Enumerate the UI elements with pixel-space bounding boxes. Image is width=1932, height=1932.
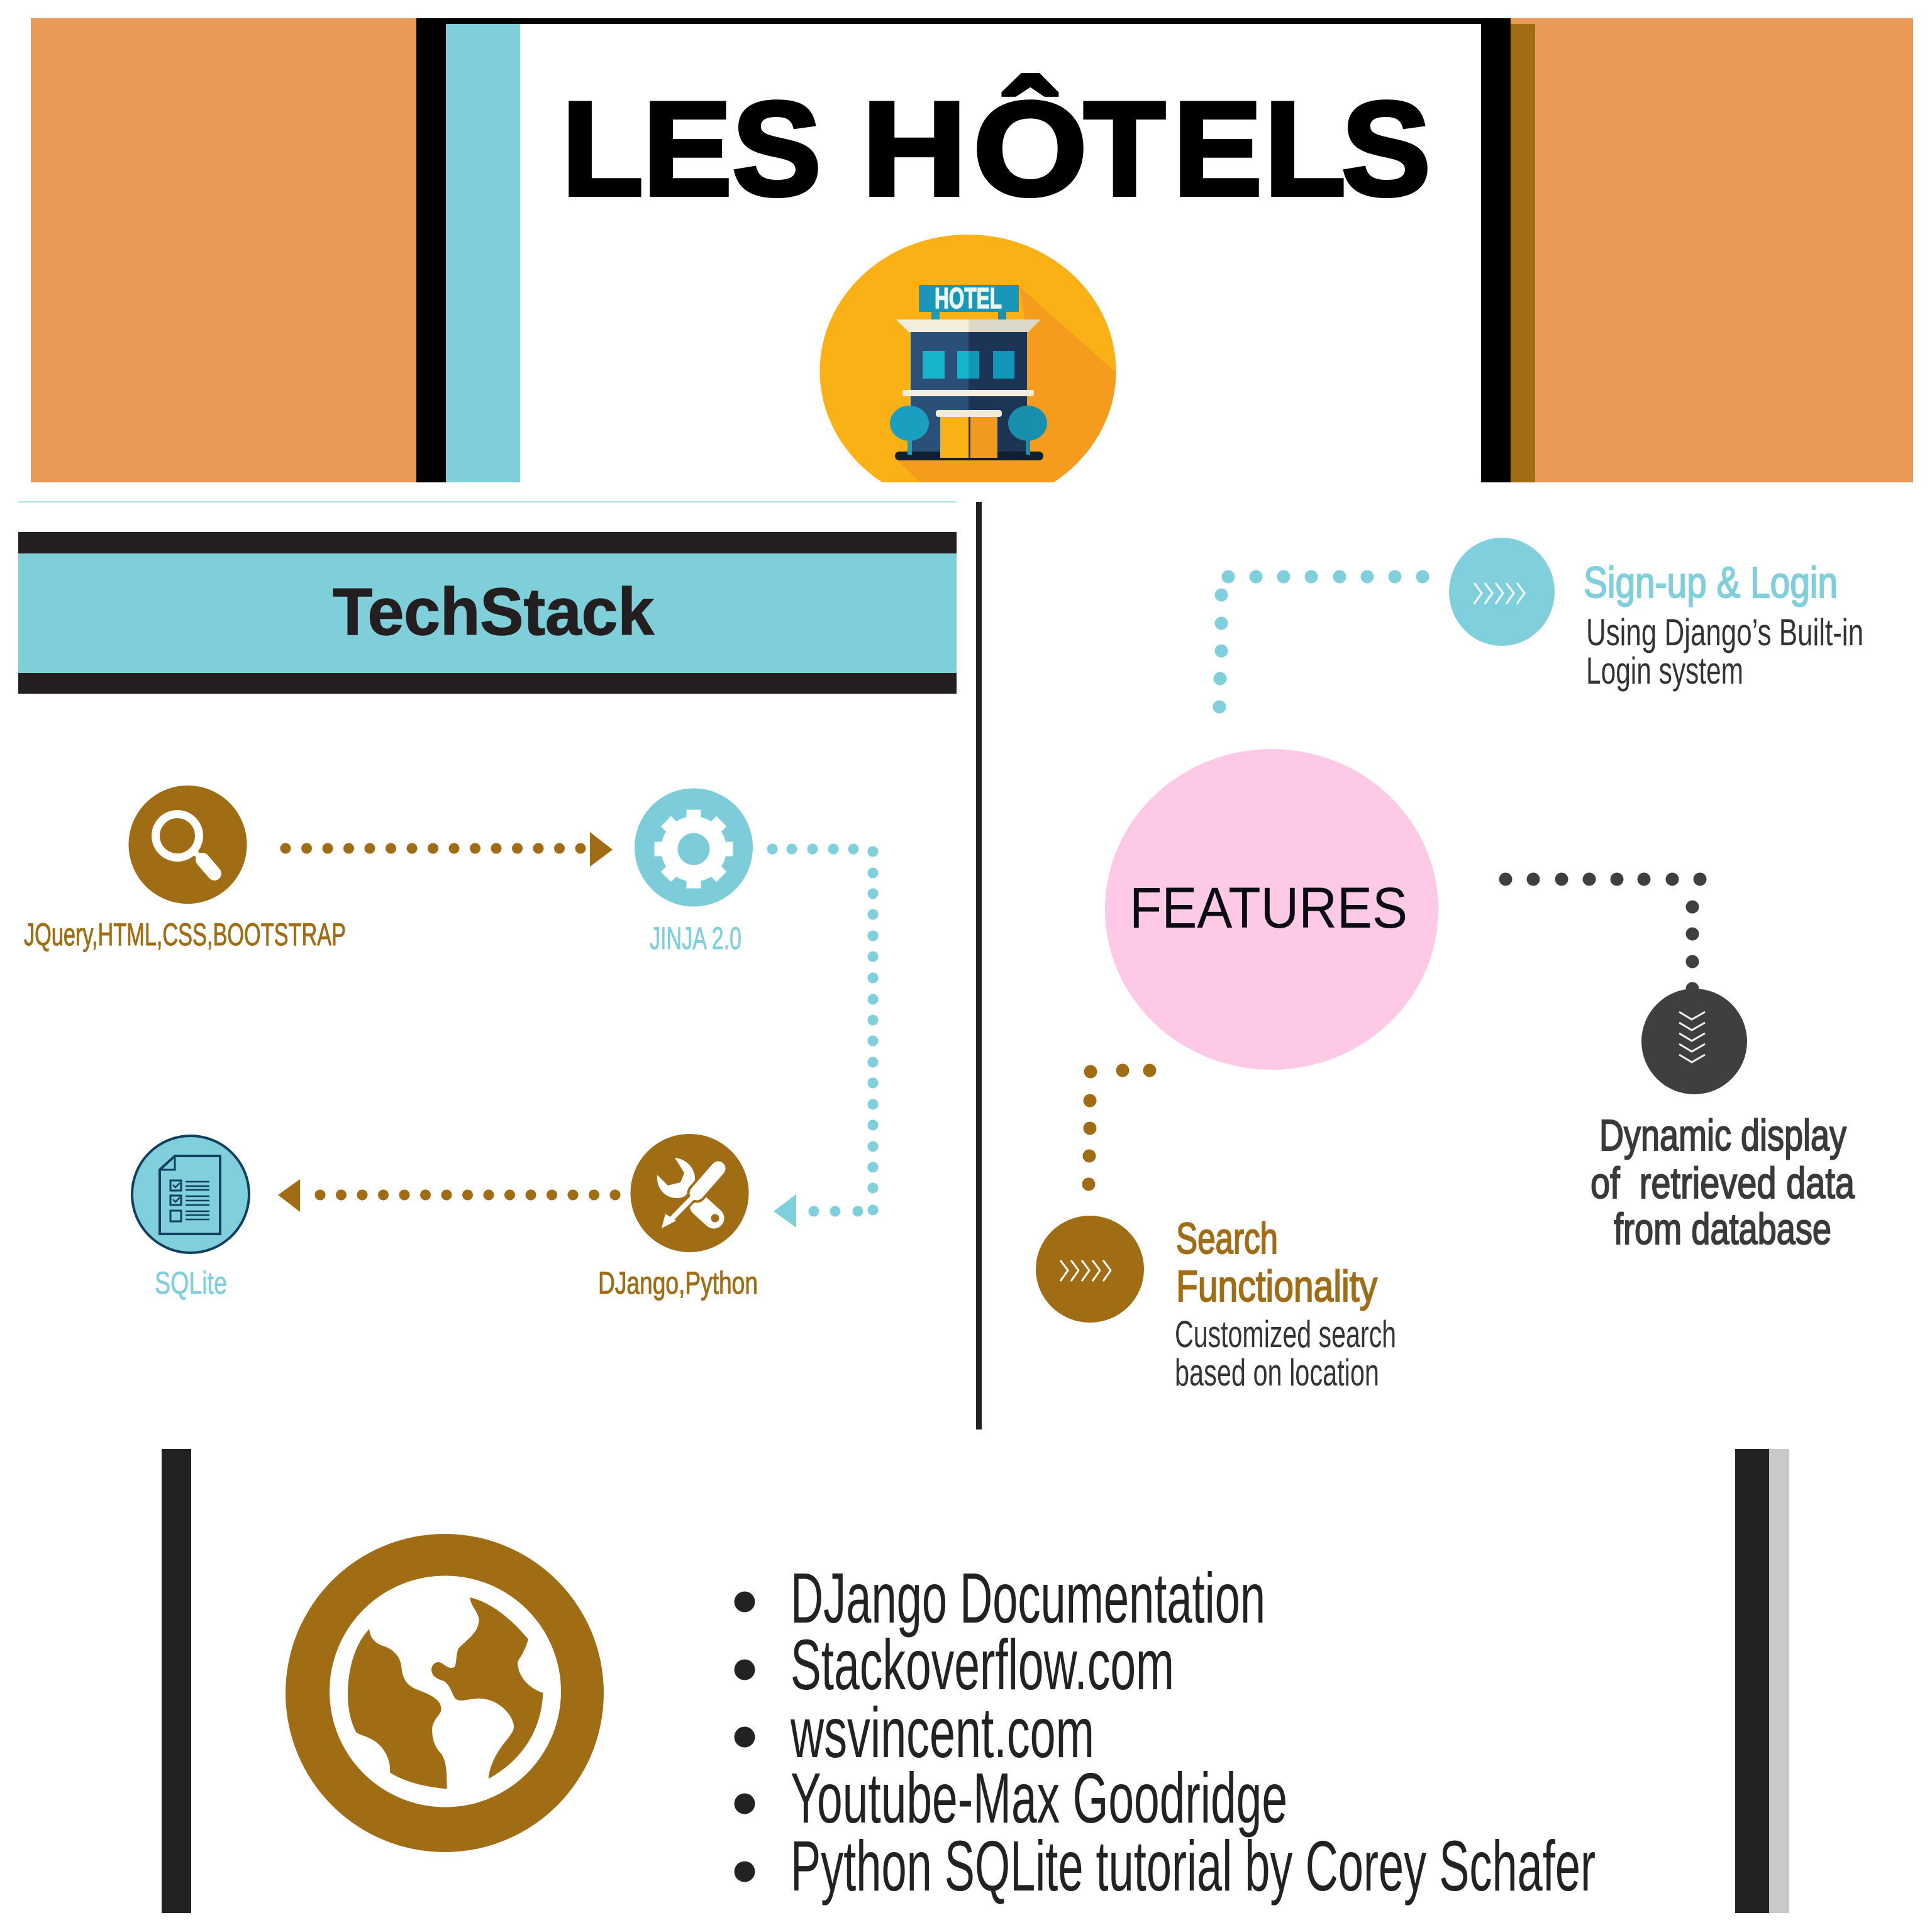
features hub circle: FEATURES [1130, 876, 1407, 940]
panel: title banner [31, 18, 1913, 508]
list item: stackoverflow [735, 1625, 1174, 1704]
list item: wsvincent: wsvincent.com [790, 1693, 1094, 1772]
panel: features [1036, 538, 1863, 1394]
list item: wsvincent [735, 1693, 1094, 1772]
label: sqlite: SQLite [155, 1265, 227, 1301]
text: sign-up and login: Sign-up & Login [1584, 558, 1838, 607]
text: sign-up and login: Login system [1586, 650, 1743, 692]
banner orange background [31, 18, 1913, 482]
banner white card with black frame [416, 18, 1535, 482]
icon: globe [286, 1534, 604, 1852]
text: search functionality: Customized search [1175, 1313, 1396, 1355]
connector: dynamic display dots [1499, 873, 1707, 995]
arrow: django to sqlite [278, 1179, 620, 1212]
panel: techstack [18, 501, 957, 1301]
resources list [735, 1558, 1596, 1906]
text: search functionality: Search [1176, 1214, 1278, 1263]
techstack heading band [18, 532, 957, 694]
text: search functionality: based on location [1175, 1352, 1379, 1394]
connector: search dots [1082, 1064, 1156, 1191]
arrow: search to jinja [280, 832, 613, 867]
text: dynamic display: from database [1614, 1204, 1831, 1253]
list item: youtube [735, 1758, 1287, 1838]
arrow: jinja to django [767, 844, 878, 1228]
divider between panels [976, 502, 982, 1430]
list item: youtube: Youtube-Max Goodridge [791, 1758, 1287, 1838]
title [562, 74, 1431, 224]
icon: magnifying glass [128, 786, 247, 904]
decorative top rule [18, 501, 957, 502]
text: sign-up and login [1584, 558, 1863, 692]
list item: sqlite tutorial [735, 1826, 1596, 1906]
label: jinja: JINJA 2.0 [650, 921, 741, 956]
techstack heading band: TechStack [333, 575, 655, 649]
title: LES [562, 74, 821, 224]
title: Ô [973, 74, 1087, 224]
list item: django documentation: DJango Documentation [791, 1558, 1265, 1638]
icon: gear [635, 789, 753, 907]
frame bars [162, 1449, 1789, 1913]
text: dynamic display [1591, 1111, 1855, 1253]
icon: dynamic display chevrons [1641, 989, 1747, 1094]
label: front-end tools: JQuery,HTML,CSS,BOOTSTRAP [24, 917, 346, 952]
features hub circle [1105, 749, 1438, 1070]
text: search functionality: Functionality [1176, 1262, 1377, 1311]
icon: sqlite document [132, 1136, 249, 1253]
list item: stackoverflow: Stackoverflow.com [791, 1625, 1174, 1704]
icon: sign-up chevrons [1449, 538, 1555, 646]
icon: hotel building [820, 235, 1116, 508]
text: search functionality [1175, 1214, 1396, 1394]
label: django python: DJango,Python [598, 1265, 758, 1301]
icon: wrench and screwdriver [630, 1134, 748, 1252]
title: TELS [1084, 74, 1431, 224]
icon: hotel building: HOTEL [935, 282, 1002, 314]
connector: sign-up dots [1213, 570, 1429, 713]
icon: search chevrons [1036, 1216, 1144, 1323]
text: dynamic display: of retrieved data [1591, 1158, 1855, 1208]
list item: django documentation [735, 1558, 1265, 1638]
panel: references [162, 1449, 1789, 1913]
text: dynamic display: Dynamic display [1599, 1111, 1846, 1160]
title: H [862, 74, 967, 224]
